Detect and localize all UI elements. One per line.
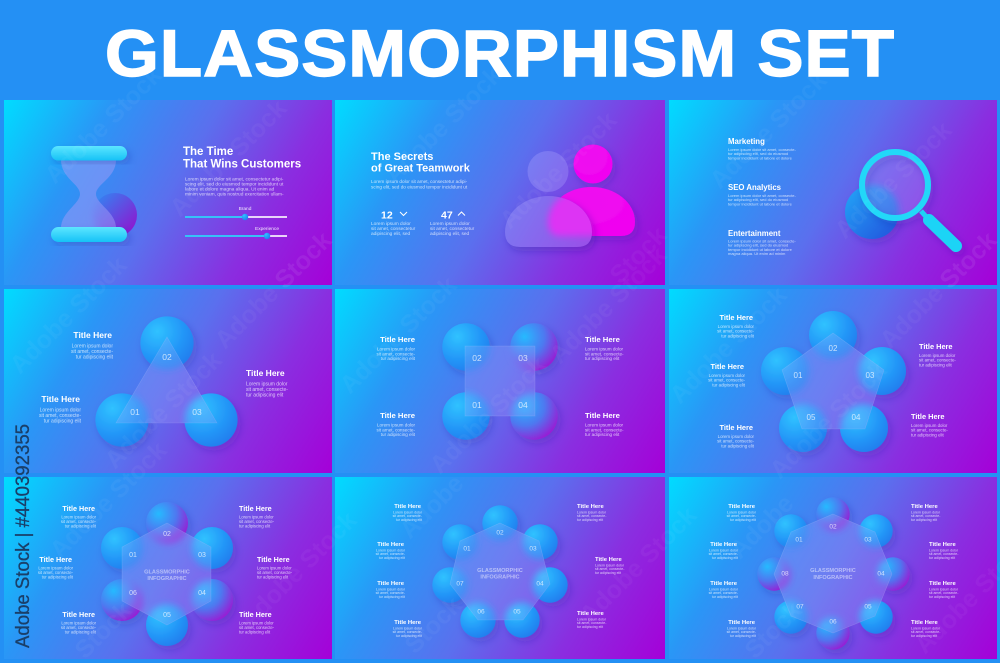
label: left 1: tur adipiscing elit [396,518,422,522]
stat: 47: sit amet, consectetur [430,226,475,232]
label: right 1: Lorem ipsum dolor [911,510,941,514]
label: right 3 [929,581,959,599]
stock watermarks: Adobe Stock [424,351,552,479]
label: right: Title Here [246,368,285,378]
label: bottom right: Lorem ipsum dolor [585,422,624,428]
label: top left: Title Here [719,313,753,322]
stock watermarks: Adobe [394,469,469,544]
label: right 2 [929,542,959,560]
label: top left [376,335,416,361]
label: bottom left: sit amet, consecte- [376,427,415,432]
glass pentagon: 02 [829,344,838,353]
label: middle left: sit amet, consecte- [708,378,746,383]
stock watermarks: Adobe Stock [209,226,337,354]
glass pentagon [782,332,884,430]
stat: 47: 47 [441,210,453,222]
panel: magnifier [669,100,997,285]
stock watermarks: Adobe Stock [234,506,362,634]
label: top left: tur adipiscing elit [65,524,97,528]
label: right 4: Lorem ipsum dolor [911,626,941,630]
label: right 1: tur adipiscing elit [577,518,603,522]
label: left 1: tur adipiscing elit [730,518,756,522]
stock watermarks: Adobe Stock [494,106,622,234]
stock watermarks: Adobe Stock [764,356,892,484]
label: bottom right: sit amet, consecte- [585,427,624,432]
label: middle right: Lorem ipsum dolor [257,566,292,570]
label: right 1 [911,504,941,522]
label: right 3 [577,611,607,629]
label: left 2: Lorem ipsum dolor [709,548,739,552]
label: left 3: sit amet, consecte- [709,591,739,595]
glass pentagon: 05 [807,413,816,422]
spheres [95,316,238,447]
glass heptagon: INFOGRAPHIC [480,574,520,580]
glass hexagon: 03 [198,552,206,559]
label: left 2: Lorem ipsum dolor [376,548,406,552]
label: bottom right [911,412,948,437]
label: bottom left: Lorem ipsum dolor [40,408,81,414]
label: bottom right: sit amet, consecte- [911,428,948,433]
glass octagon: 01 [795,536,803,544]
label: top right: Title Here [585,335,621,344]
glass hexagon: 05 [163,612,171,619]
label: middle left: sit amet, consecte- [38,570,74,575]
label: right 1: tur adipiscing elit [911,518,937,522]
stat: 47: Lorem ipsum dolor [430,221,470,227]
label: right 4: Title Here [911,620,938,626]
label: top left [61,504,97,528]
stock watermarks: Adobe [724,489,799,564]
glass triangle: 01 [130,407,140,417]
panel: five options [669,289,997,473]
stat: 47 [430,210,475,237]
label: right 2: tur adipiscing elit [595,571,621,575]
glass square: 04 [518,400,528,410]
item: marketing: tempor incididunt ut labore et dolore [728,156,793,160]
label: top left: tur adipiscing elit [721,333,755,338]
stock watermarks: Stock [269,226,337,294]
label: bottom right: tur adipiscing elit [239,630,271,634]
label: right 3: sit amet, consecte- [929,591,959,595]
stat: 12: 12 [381,210,393,222]
label: bottom left: Title Here [41,394,80,404]
glass octagon [774,514,892,634]
label: left 1: Title Here [394,504,422,510]
panel: four options [335,289,665,473]
label: bottom right: Title Here [911,412,945,421]
label: right 1: sit amet, consecte- [911,514,941,518]
glass square: 01 [472,400,482,410]
item: entertainment: Lorem ipsum dolor sit amet, consecte- [728,238,796,244]
label: top right: Lorem ipsum dolor [585,346,624,352]
text block: labore et dolore magna aliqua. Ut enim ad [185,186,275,192]
label: right 2 [595,557,625,575]
label: top left: tur adipiscing elit [76,354,114,360]
label: left 2: Title Here [710,542,738,548]
label: top right [239,504,275,528]
label: top left: Title Here [62,504,95,513]
label: top right: sit amet, consecte- [919,358,956,363]
label: left 4: Lorem ipsum dolor [393,626,423,630]
vertical stock id: Adobe Stock | #440392355 [13,424,34,648]
item: entertainment [728,229,796,256]
label: top right: sit amet, consecte- [239,519,275,524]
label: bottom right: Title Here [585,411,621,420]
panel: seven options [335,477,665,659]
title: GLASSMORPHISM SET [105,16,895,90]
icon: magnifying glass [845,149,966,258]
label: left 2 [376,542,406,560]
item: entertainment: Entertainment [728,229,781,238]
label: left 3: Title Here [710,581,738,587]
item: entertainment: tempor incididunt ut labore et dolore [728,247,793,252]
label: top right: Title Here [239,504,272,513]
label: right 2: Lorem ipsum dolor [929,548,959,552]
item: entertainment: magna aliqua. Ut enim ad minim [728,251,786,256]
label: right 4 [911,620,941,638]
glass heptagon: 07 [456,580,464,588]
text block: scing elit, sed do eiusmod tempor incididunt ut [185,182,284,188]
label: left 2 [709,542,739,560]
glass triangle: 03 [192,407,202,417]
glass octagon: 05 [864,604,872,610]
panel: three options [4,289,332,473]
label: bottom left: Lorem ipsum dolor [61,620,97,626]
stock watermarks: Adobe Stock [164,94,292,222]
label: middle right [257,555,293,580]
spheres [757,497,910,650]
label: left 4: tur adipiscing elit [730,634,756,638]
glass octagon: 07 [796,604,804,610]
label: left 3: Lorem ipsum dolor [709,588,739,592]
label: bottom left: Title Here [62,610,95,619]
label: left 3: tur adipiscing elit [379,595,405,599]
icon: people [505,144,640,254]
label: top left: sit amet, consecte- [71,349,113,355]
label: bottom left: sit amet, consecte- [717,439,755,444]
label: bottom left [376,411,416,437]
stock watermarks: Adobe Stock [379,61,507,189]
glass heptagon: 06 [477,608,485,616]
label: left 2: sit amet, consecte- [709,552,739,556]
glass triangle: 02 [162,352,172,362]
label: middle left: Lorem ipsum dolor [38,566,74,570]
spheres [432,505,568,638]
label: top left: tur adipiscing elit [381,356,416,361]
label: bottom left [61,610,97,634]
label: middle right: sit amet, consecte- [257,570,293,575]
label: right: tur adipiscing elit [246,392,284,398]
heading: of Great Teamwork [371,162,471,174]
label: right 3: Lorem ipsum dolor [577,618,607,622]
heading: The Secrets [371,151,433,163]
stock watermarks: Adobe Stock [829,116,957,244]
label: middle right: tur adipiscing elit [257,574,289,580]
stock watermarks: Adobe Stock [704,66,832,194]
glass square: 02 [472,353,482,363]
label: right 1 [577,504,607,522]
item: marketing [728,137,796,160]
slider: brand: Brand [239,206,252,212]
label: right 1: sit amet, consecte- [577,514,607,518]
stock watermarks: Adobe Stock [574,501,702,629]
label: right 1: Title Here [577,504,604,510]
stock watermarks: Stock [69,596,137,663]
label: bottom left: tur adipiscing elit [65,630,97,634]
slider: experience [185,226,287,239]
label: bottom left: sit amet, consecte- [39,413,81,419]
label: right 1: Title Here [911,504,938,510]
label: left 3: tur adipiscing elit [712,595,738,599]
label: top left: Title Here [73,330,112,340]
glass heptagon: 04 [536,580,544,588]
stat: 12 [371,210,416,237]
label: middle left: tur adipiscing elit [42,574,74,580]
label: left 4: sit amet, consecte- [393,630,423,634]
stock watermarks: Adobe Stock [664,281,792,409]
stock watermarks: Adobe Stock [99,346,227,474]
label: left 2: sit amet, consecte- [376,552,406,556]
panel: six options [4,477,332,659]
label: left 1: Lorem ipsum dolor [393,510,423,514]
glass heptagon: 05 [513,608,521,616]
label: top left: Title Here [380,335,416,344]
label: left 3: sit amet, consecte- [376,591,406,595]
text block: Lorem ipsum dolor sit amet, consectetur adipi- [185,176,284,182]
item: seo analytics: Lorem ipsum dolor sit amet, consecte- [728,193,796,198]
item: marketing: Lorem ipsum dolor sit amet, consecte- [728,147,796,152]
label: right 2: tur adipiscing elit [929,556,955,560]
label: right 4: tur adipiscing elit [911,634,937,638]
panel: teamwork [335,100,665,285]
label: right 3: Title Here [929,581,956,587]
label: bottom left: sit amet, consecte- [61,625,97,630]
glass heptagon: 01 [463,546,471,552]
heading: The Time [183,146,233,158]
text block: minim veniam, quis nostrud exercitation ullam- [185,192,284,198]
label: right [246,368,288,398]
label: top left: sit amet, consecte- [717,329,755,334]
heading [183,146,301,170]
label: right: sit amet, consecte- [246,387,288,393]
label: left 3 [376,581,406,599]
text block: Lorem ipsum dolor sit amet, consectetur adipi- [371,179,468,184]
label: bottom right: Title Here [239,610,272,619]
glass square: 03 [518,353,528,363]
label: left 1: Lorem ipsum dolor [727,510,757,514]
label: left 4: Title Here [728,620,756,626]
stock watermarks: Adobe Stock [39,61,167,189]
label: left 3 [709,581,739,599]
label: top right: tur adipiscing elit [919,362,952,367]
label: right 2: Lorem ipsum dolor [595,564,625,568]
label: right 2: Title Here [595,557,622,563]
glass hexagon: INFOGRAPHIC [147,576,187,582]
glass pentagon: 01 [794,371,803,380]
label: bottom right: tur adipiscing elit [911,432,944,437]
stock watermarks: Stock [399,591,467,659]
label: left 4 [727,620,757,638]
label: top left: sit amet, consecte- [376,351,415,356]
label: top right: Lorem ipsum dolor [239,514,274,520]
label: right 2: sit amet, consecte- [929,552,959,556]
label: right: Lorem ipsum dolor [246,382,288,388]
label: bottom right [239,610,275,634]
panel: eight options [669,477,997,659]
glass heptagon [450,522,550,620]
stock watermarks: Adobe Stock [44,436,172,564]
stock watermarks: Adobe Stock [544,241,672,369]
label: right 3: tur adipiscing elit [577,625,603,629]
label: left 1 [727,504,757,522]
stock watermarks: Adobe Stock [874,226,1000,354]
label: bottom right: tur adipiscing elit [585,432,620,437]
glass hexagon: 01 [129,552,137,559]
label: top left [71,330,114,360]
label: left 3: Title Here [377,581,405,587]
label: right 3: Lorem ipsum dolor [929,588,959,592]
label: bottom right [585,411,624,437]
label: left 1: sit amet, consecte- [727,514,757,518]
stock watermarks: Stock [739,596,807,663]
label: top left: Lorem ipsum dolor [377,346,415,352]
item: entertainment: tur adipiscing elit, sed do eiusmod [728,243,788,248]
glass heptagon: 02 [496,530,504,536]
spheres [442,323,558,440]
label: right 2: Title Here [929,542,956,548]
glass octagon: INFOGRAPHIC [813,575,853,581]
glass octagon: 08 [781,570,789,578]
label: right 3: sit amet, consecte- [577,621,607,625]
glass hexagon [122,522,212,626]
spheres [101,502,233,646]
label: right 3: tur adipiscing elit [929,595,955,599]
label: left 1: sit amet, consecte- [393,514,423,518]
item: marketing: tur adipiscing elit, sed do eiusmod [728,151,788,156]
label: right 3: Title Here [577,611,604,617]
glass hexagon: 06 [129,590,137,597]
label: middle left [38,555,74,580]
heading: That Wins Customers [183,158,301,170]
label: middle left: Lorem ipsum dolor [709,373,746,378]
glass octagon: 02 [829,524,837,530]
spheres [761,311,906,452]
label: left 1 [393,504,423,522]
label: right 1: Lorem ipsum dolor [577,510,607,514]
glass heptagon: GLASSMORPHIC [477,568,523,574]
label: left 4: tur adipiscing elit [396,634,422,638]
glass pentagon: 04 [852,413,861,422]
glass hexagon: 04 [198,590,206,597]
label: top right: sit amet, consecte- [585,351,624,356]
stat: 12: sit amet, consectetur [371,226,416,232]
label: bottom right: sit amet, consecte- [239,625,275,630]
label: bottom left: Lorem ipsum dolor [718,434,755,439]
glass pentagon: 03 [866,371,875,380]
label: left 4: sit amet, consecte- [727,630,757,634]
item: seo analytics: tur adipiscing elit, sed do eiusmod [728,197,788,202]
label: bottom left: tur adipiscing elit [44,418,82,424]
label: left 2: Title Here [377,542,405,548]
label: bottom left [717,423,755,448]
label: bottom left: Lorem ipsum dolor [377,422,415,428]
label: bottom right: Lorem ipsum dolor [911,423,948,428]
label: top right: Title Here [919,342,953,351]
label: left 4 [393,620,423,638]
label: middle right: Title Here [257,555,290,564]
label: bottom right: Lorem ipsum dolor [239,620,274,626]
label: top left: Lorem ipsum dolor [61,514,97,520]
label: left 4: Lorem ipsum dolor [727,626,757,630]
label: bottom left: tur adipiscing elit [381,432,416,437]
label: left 2: tur adipiscing elit [712,556,738,560]
item: seo analytics: tempor incididunt ut labore et dolore [728,202,793,206]
label: left 1: Title Here [728,504,756,510]
label: top left: Lorem ipsum dolor [718,324,755,329]
stat: 47: adipiscing elit, sed [430,231,470,237]
glass hexagon: 02 [163,531,171,538]
stock watermarks: Adobe Stock [4,251,132,379]
label: right 4: sit amet, consecte- [911,630,941,634]
label: bottom left: tur adipiscing elit [721,443,755,448]
label: middle left: Title Here [39,555,72,564]
label: top right: tur adipiscing elit [585,356,620,361]
text block: scing elit, sed do eiusmod tempor incididunt ut [371,184,468,190]
glass octagon: 03 [864,536,872,544]
stat: 12: adipiscing elit, sed [371,231,411,237]
label: top right [919,342,956,367]
heading [371,151,471,174]
glass heptagon: 03 [529,546,537,552]
item: marketing: Marketing [728,137,765,146]
icon: hourglass [51,146,137,246]
glass triangle [116,336,218,424]
glass hexagon: GLASSMORPHIC [144,570,190,576]
label: bottom left [39,394,82,424]
label: middle left: tur adipiscing elit [712,382,746,387]
label: left 2: tur adipiscing elit [379,556,405,560]
stock watermarks: Adobe Stock [334,271,462,399]
label: top right [585,335,624,361]
stock watermarks: Stock [604,221,672,289]
label: middle left: Title Here [710,362,744,371]
slider: experience: Experience [255,226,279,232]
label: middle left [708,362,746,387]
label: top left [717,313,755,338]
label: right 2: sit amet, consecte- [595,567,625,571]
label: left 4: Title Here [394,620,422,626]
label: left 3: Lorem ipsum dolor [376,588,406,592]
stat: 12: Lorem ipsum dolor [371,221,411,227]
label: top left: sit amet, consecte- [61,519,97,524]
item: seo analytics [728,183,796,206]
slider: brand [185,206,287,220]
glass octagon: 06 [829,618,837,626]
glass octagon: 04 [877,570,885,578]
glass square [464,346,536,416]
panel: hourglass [4,100,332,285]
label: top right: Lorem ipsum dolor [919,353,956,358]
label: top right: tur adipiscing elit [239,524,271,528]
label: bottom left: Title Here [719,423,753,432]
label: top left: Lorem ipsum dolor [72,344,113,350]
item: seo analytics: SEO Analytics [728,183,782,192]
glass octagon: GLASSMORPHIC [810,568,856,574]
label: bottom left: Title Here [380,411,416,420]
